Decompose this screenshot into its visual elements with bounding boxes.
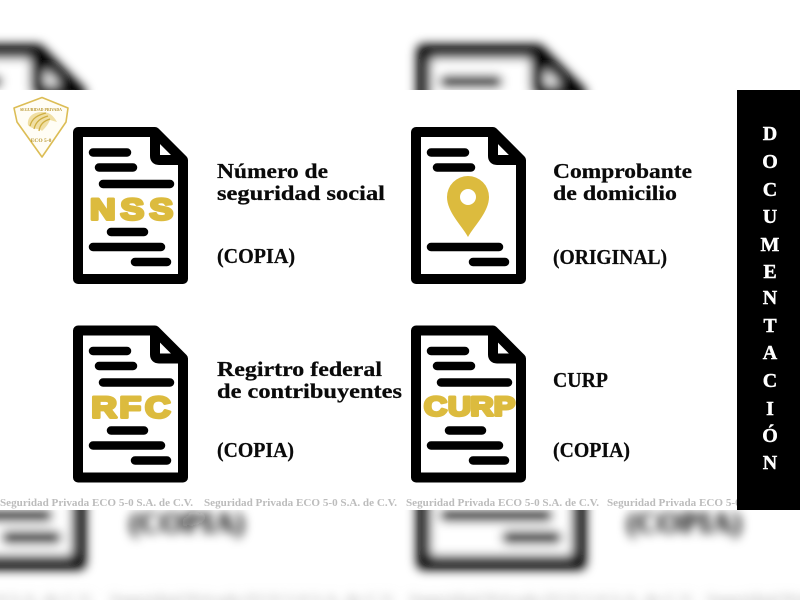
text: copia: (COPIA) (553, 438, 630, 462)
watermark strip: Seguridad Privada ECO 5-0 S.A. de C.V. (204, 497, 397, 509)
logo: eagle shield: ECO 5-0 (31, 138, 52, 144)
sidebar: vertical DOCUMENTACIÓN title (737, 90, 800, 510)
sidebar: vertical DOCUMENTACIÓN title: C (763, 179, 777, 201)
sidebar: vertical DOCUMENTACIÓN title: Ó (762, 423, 778, 447)
blurred background copy of the infographic: (COPIA) (626, 504, 742, 539)
sidebar: vertical DOCUMENTACIÓN title: I (766, 398, 774, 420)
text: Comprobante de domicilio: de domicilio (553, 181, 677, 205)
sidebar: vertical DOCUMENTACIÓN title: M (761, 234, 780, 256)
text: Registro federal de contribuyentes (217, 357, 402, 403)
panel: NSS document (78, 132, 385, 279)
text: Registro federal de contribuyentes: de contribuyentes (217, 379, 402, 403)
watermark strip: Seguridad Privada ECO 5-0 S.A. de C.V. (607, 497, 800, 509)
RFC label: RFC (91, 390, 171, 424)
sidebar: vertical DOCUMENTACIÓN title: T (763, 315, 777, 337)
icon: CURP document sheet (416, 330, 521, 478)
text: copia: (COPIA) (217, 244, 295, 268)
text: Número de seguridad social (217, 159, 385, 205)
text: CURP: CURP (553, 368, 608, 392)
panel: CURP document (416, 330, 630, 478)
icon: RFC document sheet (78, 330, 183, 478)
watermark strip (0, 497, 800, 509)
sidebar: vertical DOCUMENTACIÓN title: E (763, 261, 777, 283)
logo: eagle shield: SEGURIDAD PRIVADA (20, 107, 63, 112)
sidebar: vertical DOCUMENTACIÓN title: N (763, 287, 778, 309)
sidebar: vertical DOCUMENTACIÓN title: O (762, 151, 778, 173)
watermark strip: Seguridad Privada ECO 5-0 S.A. de C.V. (406, 497, 599, 509)
blurred background copy of the infographic: (COPIA) (129, 504, 245, 539)
text: Número de seguridad social: seguridad social (217, 181, 385, 205)
icon: NSS document sheet (78, 132, 183, 279)
text: original: (ORIGINAL) (553, 245, 667, 269)
CURP label: CURP (424, 392, 515, 422)
sidebar: vertical DOCUMENTACIÓN title: U (763, 206, 777, 228)
sidebar: vertical DOCUMENTACIÓN title: D (763, 123, 777, 145)
sidebar: vertical DOCUMENTACIÓN title: A (763, 342, 778, 364)
sidebar: vertical DOCUMENTACIÓN title: C (763, 370, 777, 392)
logo: eagle shield (14, 98, 68, 157)
text: Número de seguridad social: Número de (217, 159, 328, 183)
watermark strip: Seguridad Privada ECO 5-0 S.A. de C.V. (0, 497, 193, 509)
text: Comprobante de domicilio (553, 159, 692, 205)
NSS label: NSS (90, 192, 173, 226)
panel: Comprobante de domicilio document (416, 132, 692, 279)
text: Comprobante de domicilio: Comprobante (553, 159, 692, 183)
icon: location pin (447, 176, 489, 237)
panel: RFC document (78, 330, 402, 478)
text: Registro federal de contribuyentes: Regirtro federal (217, 357, 382, 381)
white content panel (0, 90, 737, 510)
text: copia: (COPIA) (217, 438, 294, 462)
icon: location document sheet (416, 132, 521, 279)
sidebar: vertical DOCUMENTACIÓN title: N (763, 452, 778, 474)
